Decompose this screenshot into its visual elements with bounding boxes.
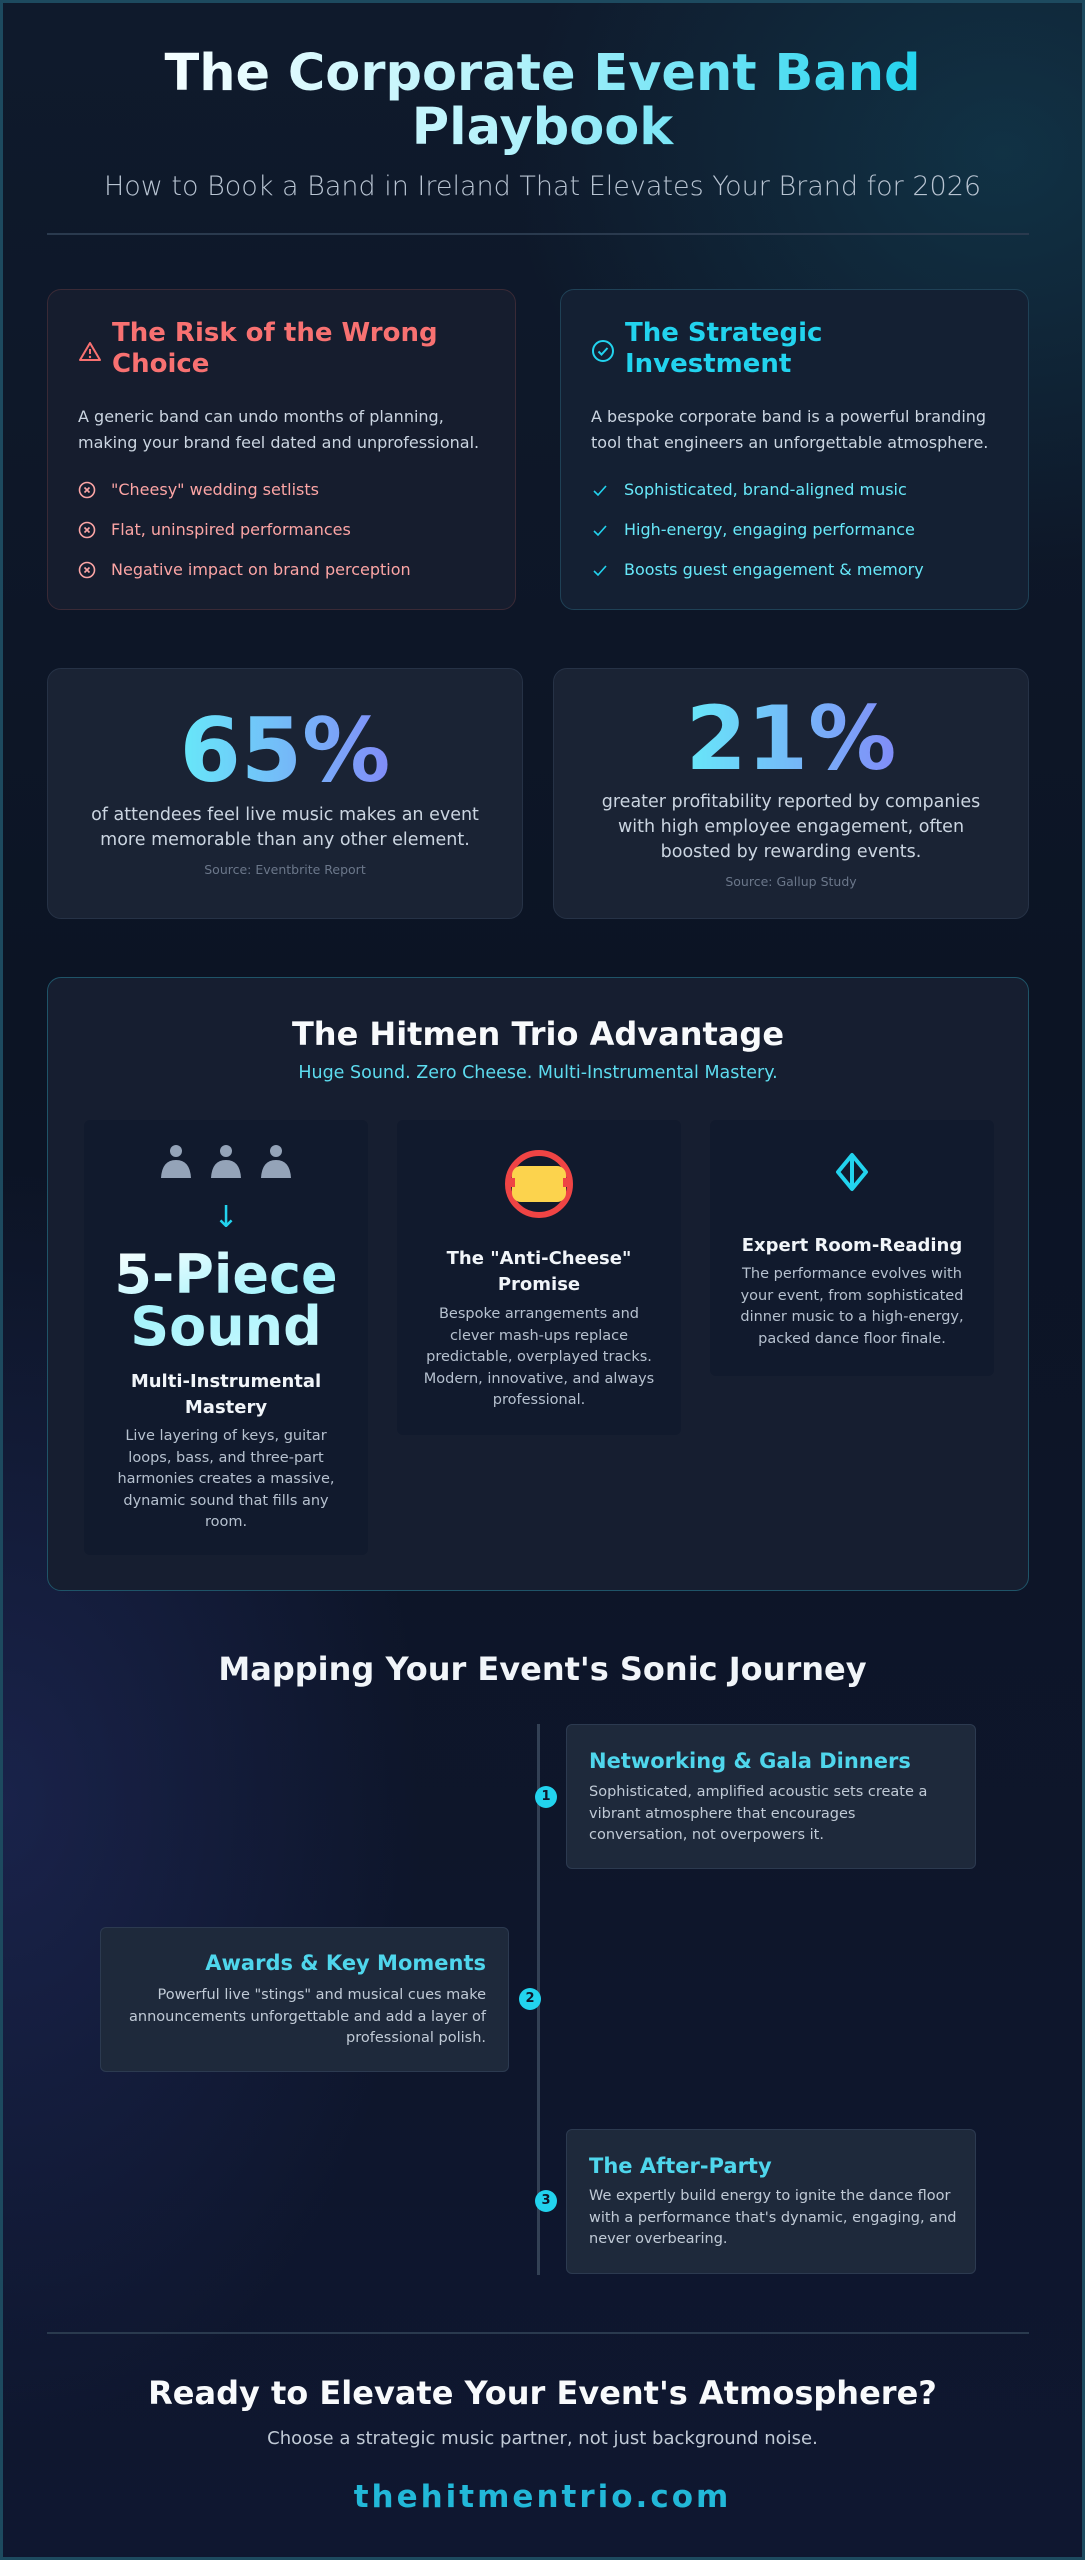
title: Mastery — [185, 1397, 267, 1418]
panel: investment — [560, 289, 1029, 610]
step 2: awards — [100, 1927, 509, 2072]
step 2: awards: Awards & Key Moments — [205, 1951, 486, 1975]
title: The Corporate Event Band — [164, 44, 921, 103]
list: benefits: High-energy, engaging performance — [624, 520, 915, 539]
list: risks: Flat, uninspired performances — [111, 520, 351, 539]
text: 21% caption: boosted by rewarding events. — [661, 842, 921, 862]
heading: investment: The Strategic — [625, 318, 822, 348]
big text: 5-Piece Sound — [114, 1243, 338, 1358]
subtitle: How to Book a Band in Ireland That Elevates Your Brand for 2026 — [104, 171, 981, 202]
text: 65% caption: more memorable than any other element. — [100, 830, 470, 850]
list: risks: "Cheesy" wedding setlists — [111, 480, 319, 499]
icon: up-down diamond — [836, 1152, 868, 1192]
marker 3: 3 — [541, 2193, 551, 2208]
title: Promise — [498, 1274, 580, 1295]
description: Live layering of keys, guitar loops, bass, and three-part harmonies creates a massive, dynamic sound that fills any room. — [117, 1428, 335, 1530]
text: risk intro: A generic band can undo months of planning, — [78, 407, 444, 426]
icon: check circle — [592, 340, 614, 362]
title — [131, 1371, 321, 1418]
text: risk intro — [78, 407, 479, 452]
step 1: networking: Sophisticated, amplified acoustic sets create a vibrant atmosphere that encourages conversation, not overpowers it. — [589, 1784, 927, 1843]
text: 21% caption: greater profitability reported by companies — [602, 792, 980, 812]
heading: The Hitmen Trio Advantage — [292, 1015, 784, 1053]
list: benefits — [594, 480, 924, 579]
subheading: Huge Sound. Zero Cheese. Multi-Instrumental Mastery. — [298, 1063, 778, 1083]
stat card: 21% — [553, 668, 1029, 919]
panel: hitmen advantage — [47, 977, 1029, 1591]
stat card: 65% — [47, 668, 523, 919]
panel: risk — [47, 289, 516, 610]
heading: investment: Investment — [625, 349, 791, 379]
step 3: after-party — [566, 2129, 976, 2274]
marker 1: 1 — [541, 1789, 551, 1804]
marker 2: 2 — [525, 1991, 535, 2006]
card: room reading — [710, 1120, 994, 1376]
description: Bespoke arrangements and clever mash-ups replace predictable, overplayed tracks. Modern, innovative, and always professional. — [424, 1306, 654, 1408]
heading: sonic journey: Mapping Your Event's Sonic Journey — [218, 1650, 867, 1688]
title — [164, 44, 921, 157]
big text: 5-Piece Sound: 5-Piece — [114, 1243, 338, 1306]
description: The performance evolves with your event, from sophisticated dinner music to a high-energy, packed dance floor finale. — [740, 1266, 964, 1346]
text: investment intro: tool that engineers an unforgettable atmosphere. — [591, 433, 988, 452]
list: risks: Negative impact on brand perception — [111, 560, 411, 579]
card: anti-cheese — [397, 1120, 681, 1435]
step 1: networking: Networking & Gala Dinners — [589, 1749, 911, 1773]
CTA heading: Ready to Elevate Your Event's Atmosphere? — [148, 2374, 937, 2412]
title: Expert Room-Reading — [742, 1235, 962, 1256]
icon: people — [161, 1145, 291, 1178]
heading: risk: Choice — [112, 349, 209, 379]
icon: warning — [79, 342, 101, 361]
title: The "Anti-Cheese" — [447, 1248, 631, 1269]
heading: risk — [112, 318, 438, 379]
step 2: awards: Powerful live "stings" and musical cues make announcements unforgettable and add a layer of professional polish. — [129, 1987, 486, 2046]
list: risks — [78, 480, 411, 579]
marker 1 — [535, 1786, 557, 1808]
text: risk intro: making your brand feel dated and unprofessional. — [78, 433, 479, 452]
step 3: after-party: We expertly build energy to ignite the dance floor with a performance that's dynamic, engaging, and never overbearing. — [589, 2188, 956, 2247]
title: Multi-Instrumental — [131, 1371, 321, 1392]
CTA subtext: Choose a strategic music partner, not just background noise. — [267, 2428, 818, 2449]
icon: no cheese — [505, 1150, 573, 1218]
number: 65%: 65% — [180, 699, 390, 802]
arrow: down: ↓ — [213, 1200, 239, 1235]
text: 21% caption: with high employee engagement, often — [618, 817, 964, 837]
marker 2 — [519, 1988, 541, 2010]
text: investment intro: A bespoke corporate band is a powerful branding — [591, 407, 986, 426]
CTA url: thehitmentrio.com — [354, 2479, 731, 2515]
title — [446, 1248, 631, 1295]
timeline — [100, 1724, 976, 2275]
list: benefits: Sophisticated, brand-aligned music — [624, 480, 907, 499]
step 1: networking — [566, 1724, 976, 1869]
card: 5-piece sound — [84, 1120, 368, 1555]
number: 21%: 21% — [686, 687, 896, 790]
text: 65% caption — [91, 805, 479, 850]
text: 65% caption: of attendees feel live music makes an event — [91, 805, 479, 825]
heading: investment — [625, 318, 822, 379]
marker 3 — [535, 2190, 557, 2212]
step 3: after-party: The After-Party — [589, 2154, 772, 2178]
text: 21% caption — [602, 792, 980, 862]
big text: 5-Piece Sound: Sound — [130, 1295, 322, 1358]
heading: risk: The Risk of the Wrong — [112, 318, 438, 348]
source: Source: Eventbrite Report — [204, 862, 366, 877]
title: Playbook — [412, 98, 673, 157]
source: Source: Gallup Study — [725, 874, 857, 889]
text: investment intro — [591, 407, 988, 452]
list: benefits: Boosts guest engagement & memory — [624, 560, 924, 579]
